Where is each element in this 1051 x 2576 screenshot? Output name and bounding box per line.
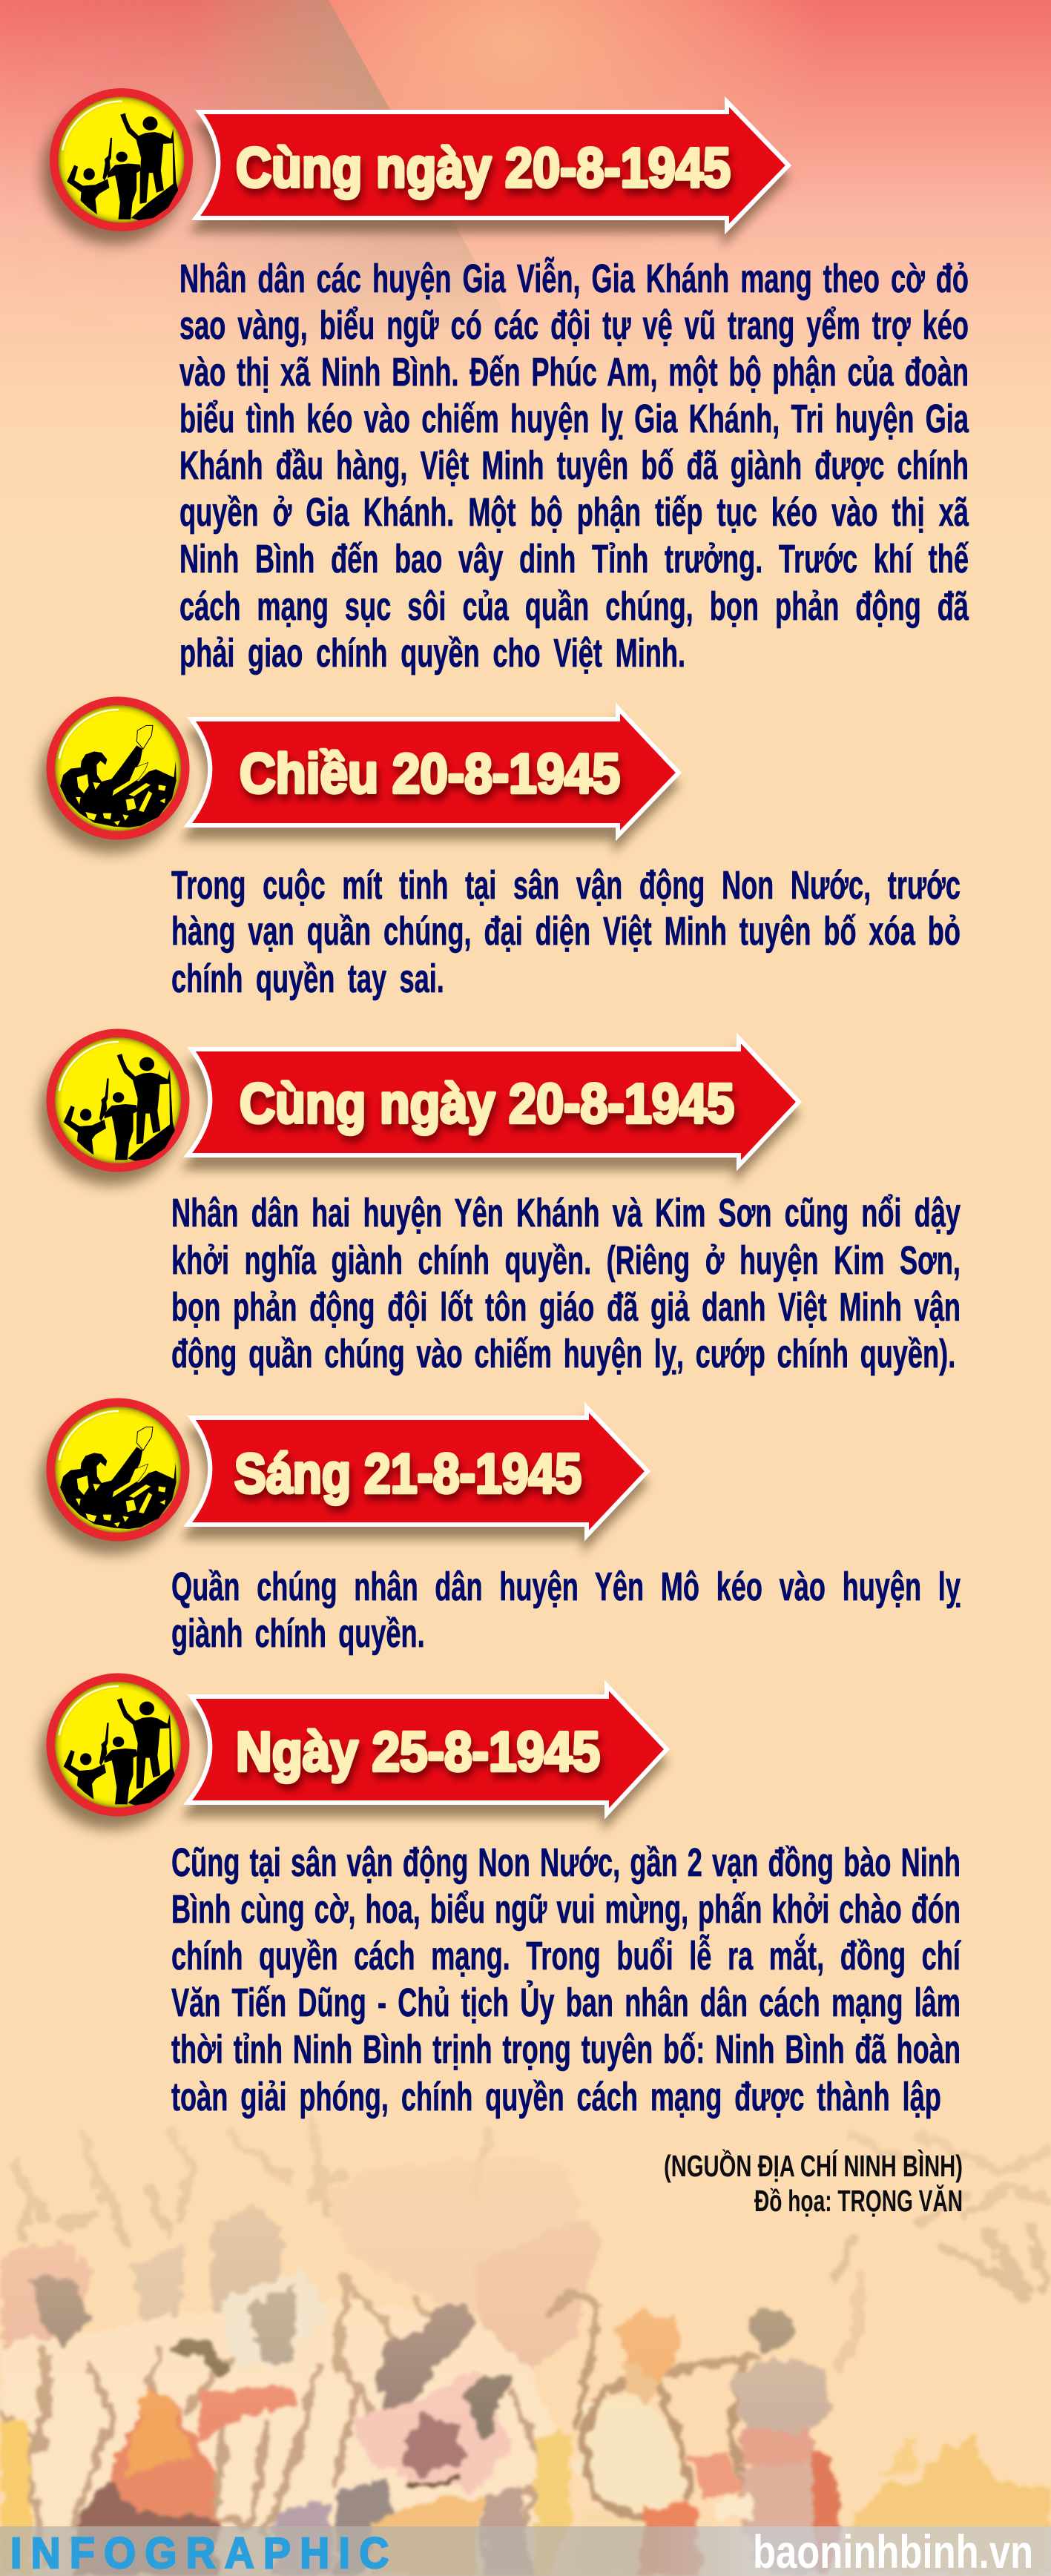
heading: Chiều 20-8-1945: Chiều 20-8-1945: [240, 742, 620, 805]
section 5 header: [46, 1673, 667, 1817]
text block: section 2 body: [171, 863, 961, 1001]
text block: section 2 body: Trong cuộc mít tinh tại sân vận động Non Nước, trước: [171, 863, 961, 908]
section 2 header: [46, 697, 679, 839]
icon: soldiers badge: [46, 1673, 190, 1817]
text block: section 2 body: hàng vạn quần chúng, đại diện Việt Minh tuyên bố xóa bỏ: [171, 909, 961, 954]
crowd illustration background: [0, 2121, 1051, 2576]
text block: section 1 body: Nhân dân các huyện Gia Viễn, Gia Khánh mang theo cờ đỏ: [179, 257, 969, 301]
text block: section 2 body: chính quyền tay sai.: [171, 957, 444, 1001]
text block: section 4 body: [171, 1565, 961, 1656]
text block: section 4 body: Quần chúng nhân dân huyện Yên Mô kéo vào huyện lỵ: [171, 1565, 961, 1609]
text block: section 3 body: động quần chúng vào chiếm huyện lỵ, cướp chính quyền).: [171, 1332, 955, 1376]
text block: section 3 body: khởi nghĩa giành chính quyền. (Riêng ở huyện Kim Sơn,: [171, 1238, 961, 1283]
section 1 header: [50, 88, 788, 231]
arrow banner: Cùng ngày 20-8-1945: [196, 102, 788, 229]
source and credit: Đồ họa: TRỌNG VĂN: [754, 2184, 963, 2218]
text block: section 3 body: bọn phản động đội lốt tôn giáo đã giả danh Việt Minh vận: [171, 1285, 961, 1330]
text block: section 5 body: thời tỉnh Ninh Bình trịnh trọng tuyên bố: Ninh Bình đã hoàn: [171, 2027, 961, 2072]
arrow banner: Chiều 20-8-1945: [188, 708, 679, 836]
diagonal shaded band: [193, 0, 501, 308]
icon: crowd badge: [46, 1398, 190, 1541]
section 3 header: [46, 1029, 799, 1172]
text block: section 5 body: Văn Tiến Dũng - Chủ tịch Ủy ban nhân dân cách mạng lâm: [171, 1981, 961, 2025]
footer label: INFOGRAPHIC: INFOGRAPHIC: [10, 2529, 389, 2576]
arrow banner: Ngày 25-8-1945: [188, 1685, 667, 1814]
text block: section 3 body: [171, 1191, 961, 1376]
text block: section 1 body: biểu tình kéo vào chiếm huyện lỵ Gia Khánh, Tri huyện Gia: [179, 397, 969, 441]
text block: section 5 body: chính quyền cách mạng. Trong buổi lễ ra mắt, đồng chí: [171, 1934, 961, 1978]
text block: section 1 body: vào thị xã Ninh Bình. Đến Phúc Am, một bộ phận của đoàn: [179, 350, 969, 394]
icon: soldiers badge: [46, 1029, 190, 1172]
text block: section 1 body: [179, 257, 969, 676]
text block: section 1 body: phải giao chính quyền cho Việt Minh.: [179, 631, 685, 676]
arrow banner: Sáng 21-8-1945: [188, 1407, 648, 1536]
text block: section 3 body: Nhân dân hai huyện Yên Khánh và Kim Sơn cũng nổi dậy: [171, 1191, 961, 1235]
section 4 header: [46, 1398, 648, 1541]
text block: section 1 body: Khánh đầu hàng, Việt Minh tuyên bố đã giành được chính: [179, 443, 969, 488]
text block: section 4 body: giành chính quyền.: [171, 1611, 425, 1656]
text block: section 1 body: quyền ở Gia Khánh. Một bộ phận tiếp tục kéo vào thị xã: [179, 490, 969, 535]
icon: crowd badge: [46, 697, 190, 839]
heading: Cùng ngày 20-8-1945: Cùng ngày 20-8-1945: [240, 1072, 734, 1135]
heading: Cùng ngày 20-8-1945: Cùng ngày 20-8-1945: [236, 136, 731, 199]
top centre glow: [193, 0, 831, 282]
heading: Sáng 21-8-1945: Sáng 21-8-1945: [234, 1442, 581, 1505]
footer strip: [0, 2526, 1051, 2576]
text block: section 5 body: [171, 1840, 961, 2119]
icon: soldiers badge: [50, 88, 193, 231]
text block: section 1 body: Ninh Bình đến bao vây dinh Tỉnh trưởng. Trước khí thế: [179, 537, 969, 581]
text block: section 5 body: toàn giải phóng, chính quyền cách mạng được thành lập: [171, 2075, 941, 2119]
source and credit: [664, 2149, 963, 2218]
text block: section 1 body: cách mạng sục sôi của quần chúng, bọn phản động đã: [179, 584, 969, 629]
text block: section 5 body: Cũng tại sân vận động Non Nước, gần 2 vạn đồng bào Ninh: [171, 1840, 961, 1885]
text block: section 5 body: Bình cùng cờ, hoa, biểu ngữ vui mừng, phấn khởi chào đón: [171, 1887, 961, 1932]
arrow banner: Cùng ngày 20-8-1945: [188, 1038, 799, 1166]
text block: section 1 body: sao vàng, biểu ngữ có các đội tự vệ vũ trang yểm trợ kéo: [179, 303, 969, 348]
heading: Ngày 25-8-1945: Ngày 25-8-1945: [236, 1720, 600, 1783]
